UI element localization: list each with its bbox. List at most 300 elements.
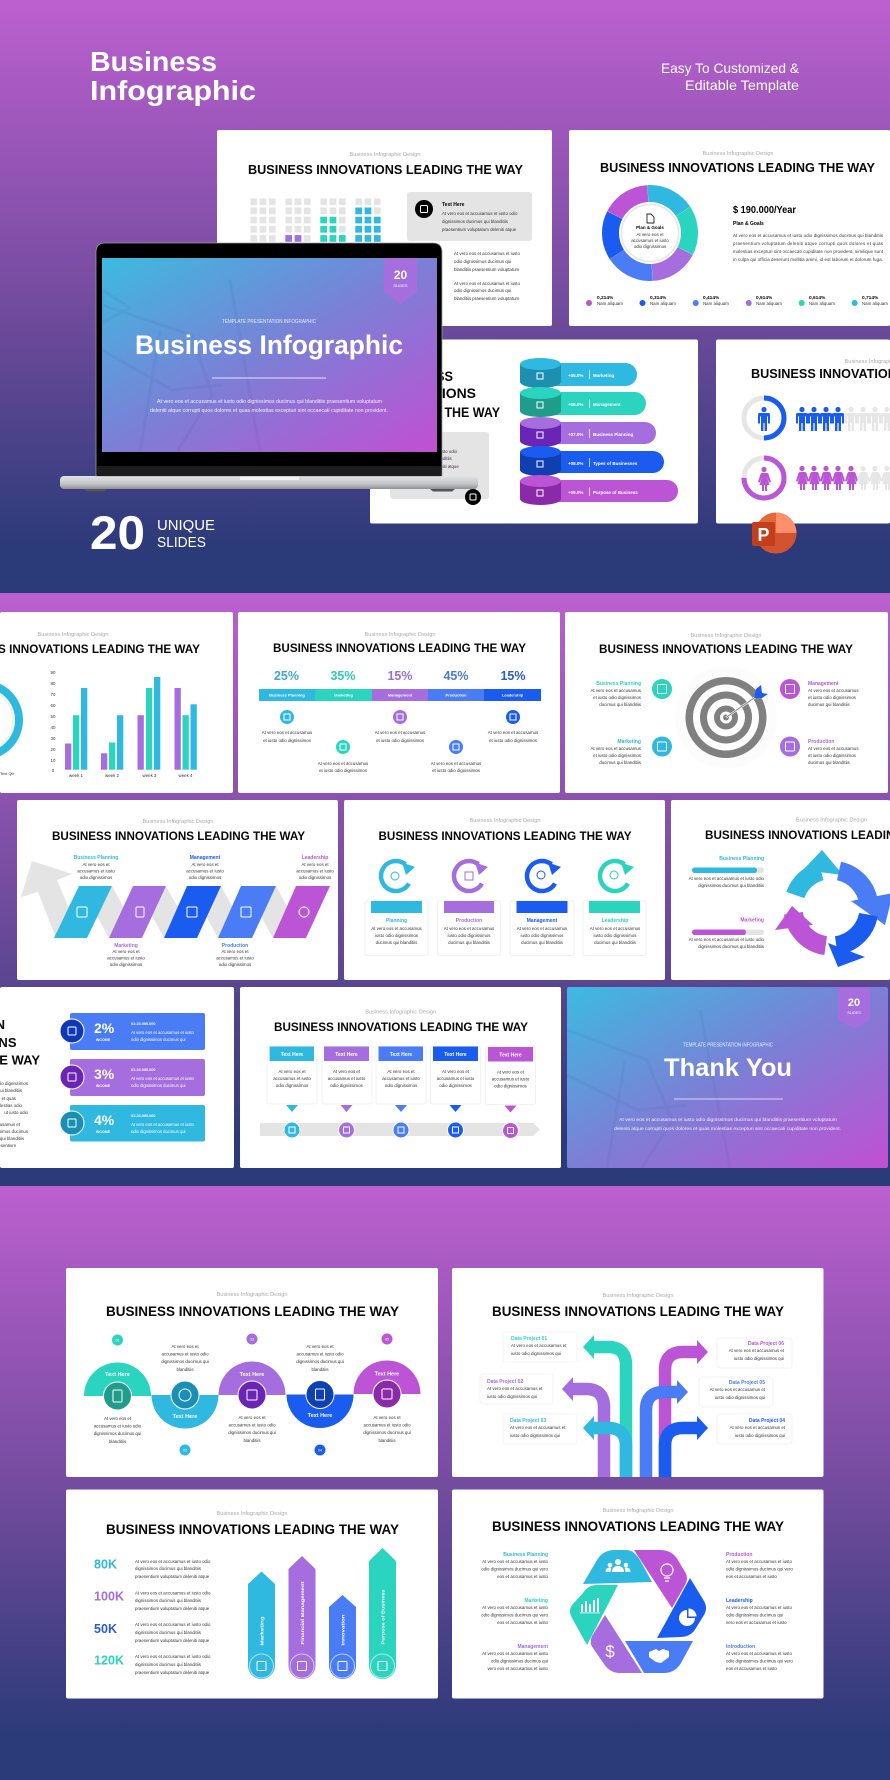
left captions: Business Planning [503,1552,548,1558]
lower captions: Production [222,943,248,949]
progress: marketing: dignissimos ducimus qui blanditiis [698,944,765,949]
step 1 [267,1046,317,1138]
legend: Nam aliquam [809,301,835,306]
heading: BUSINESS INNOVATIONS LEADING THE WAY [600,161,876,175]
right captions: et iusto odio dignissimos [808,753,857,758]
upper captions: odio dignissimos [80,875,113,880]
bar chart: week 3 [143,773,157,778]
wave segment 2: dignissimos ducimus qui [161,1359,209,1364]
percentages: 25% [274,669,299,683]
price text [733,205,884,262]
right captions: Introduction [726,1644,755,1650]
subtitle: Editable Template [685,77,799,93]
bar chart [51,670,197,778]
step 5 [486,1047,536,1138]
card: 2 percent: odio dignissimos ducimus qui [131,1037,186,1042]
metric: 120K: At vero eos et accusamus et iusto odio [135,1654,211,1659]
screen body text: At vero eos et accusamus et iusto odio dignissimos ducimus qui blanditiis praesentium voluptatum [157,399,382,405]
wave segment 5: accusamus et iusto odio [363,1422,411,1428]
card: data project 05: iusto odio dignissimos qui [715,1395,765,1400]
text block: ut iusto odio [4,1110,29,1115]
hexagon cycle [570,1550,706,1673]
icons [652,679,800,756]
step 3: At vero eos et [387,1069,415,1074]
card: data project 01 [503,1332,577,1362]
metric: 50K: praesentium voluptatum deleniti atque [135,1638,210,1643]
icon: pie [679,1608,696,1626]
arrow: innovation: Innovation [340,1614,346,1645]
step 1: At vero eos et [278,1069,306,1074]
left captions: eos et accusamus et iusto [497,1620,549,1625]
upper captions [74,855,334,880]
main title [90,46,256,106]
panel: branching arrows slide [452,1268,824,1477]
captions [262,730,539,773]
icon: people [606,1559,630,1572]
bar chart: 40 [51,725,56,730]
step 1: odio dignissimos [276,1083,309,1088]
card: management: ducimus qui blanditiis [521,940,564,945]
bar: management [520,387,646,417]
panel: percent bar slide: Business Infographic Design [365,632,435,638]
percentages [274,669,526,683]
callout box [390,432,489,505]
captions: et iusto odio dignissimos [432,768,481,773]
heading [381,369,500,420]
upper captions: accusamus et iusto [186,868,224,874]
partial donut [0,684,19,776]
people row: magenta [796,466,890,490]
panel: target slide [565,612,888,793]
heading: BUSINESS INNOVATIONS LEADING THE WAY [492,1304,784,1319]
left captions: odio dignissimos ducimus qui [491,1658,548,1664]
ring: magenta [744,458,784,498]
metric: 120K: dignissimos ducimus qui blanditiis [135,1662,202,1667]
card: 4 percent: At vero eos et accusamus et iusto [131,1122,195,1127]
text block [454,251,520,301]
price text: Plan & Goals [733,221,764,227]
screen body text: deleniti atque corrupti quos dolores et quas molestias excepturi sint occaecati cupiditate non provident. [150,408,388,414]
left captions: vero eos et accusamus et iusto [487,1666,549,1671]
left captions: ducimus qui blanditiis [599,702,642,707]
legend: 0,214% [597,295,614,301]
lower captions [107,943,254,967]
badge [384,258,417,304]
panel: target slide: Business Infographic Design [691,633,761,639]
captions: At vero eos et accusamus [488,730,539,735]
right captions: odio dignissimos ducimus qui vero [726,1566,793,1572]
card: data project 03 [503,1414,577,1444]
captions: et iusto odio dignissimos [319,768,368,773]
heading: BUSINESS INNOVATIONS LEADING THE WAY [492,1519,784,1534]
timeline band [260,1123,540,1136]
callout box: voluptatum deleniti atque [410,464,459,469]
legend: Nam aliquam [703,301,729,306]
wave segment 2: accusamus et iusto odio [161,1352,209,1356]
background section 1 [0,0,890,593]
card: data project 06 [717,1338,792,1368]
left captions: et iusto odio dignissimos [593,695,642,700]
wave segment 1: blanditiis [109,1439,127,1444]
legend: 0,714% [862,295,879,301]
segmented bar [259,689,541,701]
wave segment 4: Text Here [308,1413,332,1419]
card: production [438,856,500,956]
upper captions: At vero eos et [191,862,219,867]
card: 3 percent: INCOME [96,1084,111,1088]
bar: marketing [520,358,637,388]
wave segment 2: blanditiis [176,1367,194,1372]
zigzag arrow [21,861,330,938]
icon: bar chart [580,1598,600,1613]
text block: et quas [2,1096,17,1101]
right captions: At vero eos et accusamus et iusto [726,1559,792,1564]
slide count: SLIDES [157,534,206,551]
captions: et iusto odio dignissimos [376,738,425,743]
bar chart: 90 [51,670,56,675]
card: data project 05: Data Project 05 [729,1380,765,1386]
target icon [675,666,777,768]
heading: LEADING THE WAY [385,405,500,420]
right captions: vero eos et accusamus et iusto [726,1620,787,1625]
price text: At vero eos et accusamus et iusto odio dignissimos ducimus qui blanditiis [733,233,884,238]
heading: BUSINESS INNOVATIONS LEADING THE WAY [248,163,524,177]
panel: bar chart slide: Business Infographic Design [38,632,108,638]
lower captions: accusamus et iusto [107,956,145,960]
metric: 50K: dignissimos ducimus qui blanditiis [135,1630,202,1635]
card: planning: ducimus qui blanditiis [376,940,418,945]
bar chart: 80 [51,681,56,686]
left captions: Marketing [617,739,641,745]
text block: odio dignissimos ducimus qui [454,259,511,264]
legend: Nam aliquam [862,301,888,306]
percentages: 45% [443,669,469,683]
arrow: financial management [288,1556,316,1679]
arrow: purpose of business: Purpose of Business [380,1589,386,1645]
metric: 120K: 120K [94,1652,125,1668]
panel: waffle chart slide: Business Infographic Design [350,152,420,158]
wave segment 3: dignissimos ducimus qui [228,1430,276,1435]
legend: Nam aliquam [756,301,782,306]
bar chart: 70 [51,692,56,697]
bar chart: week 1 [69,773,84,778]
right captions: At vero eos et accusamus [808,746,859,751]
badge: SLIDES [847,1011,861,1015]
card: data project 02 [480,1374,553,1404]
step 4: odio dignissimos [439,1083,473,1088]
subtitle [661,60,800,93]
captions: At vero eos et accusamus [262,730,313,735]
card: production: iusto odio dignissimos [448,933,491,938]
progress: business planning: dignissimos ducimus qui blanditiis [698,883,765,888]
right captions: At vero eos et accusamus [808,688,859,693]
wave segment 5 [354,1334,420,1443]
card: data project 05: At vero eos et accusamus et [710,1387,766,1392]
laptop screen: TEMPLATE PRESENTATION INFOGRAPHIC [222,319,316,325]
bar: management: +06.0% [568,402,583,407]
badge: SLIDES [393,283,408,288]
heading: BUSINESS INNOVATIONS LEADING THE WAY [378,829,632,843]
icons [280,710,520,754]
wave segment 4: accusamus et iusto odio [296,1352,344,1356]
left captions: ducimus qui blanditiis [599,760,642,765]
text block: odio dignissimos ducimus qui [454,288,511,293]
badge [838,987,870,1029]
donut centre: Plan & Goals [636,225,664,230]
text block [0,1081,29,1148]
icon: bulb [661,1564,673,1581]
arrow: innovation [329,1595,356,1679]
step 1: Text Here [281,1052,303,1058]
captions: et iusto odio dignissimos [489,738,538,743]
bar: marketing: +05.0% [568,373,583,378]
card: data project 04: iusto odio dignissimos qui [735,1433,785,1438]
left captions [590,681,642,765]
arrow: purpose of business [369,1548,396,1679]
card: management: Management [527,918,558,924]
upper captions: Business Planning [74,855,118,861]
card: 3 percent: At vero eos et accusamus et iusto [131,1076,195,1081]
card: 4 percent: 01:23.000.000 [131,1114,156,1118]
card: 3 percent: odio dignissimos ducimus qui [131,1083,186,1088]
callout box [407,192,532,241]
bar chart: 20 [51,747,56,752]
metric: 120K [94,1652,211,1675]
subtitle: Easy To Customized & [661,60,800,76]
wave segment 5: dignissimos ducimus qui [363,1430,411,1435]
legend: 0,614% [809,295,826,301]
legend: Nam aliquam [650,301,676,306]
icon: powerpoint: P [757,525,770,545]
wave segment 4: dignissimos ducimus qui [296,1359,344,1364]
panel: hexagon cycle slide: Business Infographic Design [603,1508,673,1514]
card: management: At vero eos et accusamus [517,926,568,931]
step 1: accusamus et iusto [273,1076,311,1081]
text block: At vero eos et accusamus et iusto [454,251,520,256]
card: data project 04 [717,1414,792,1444]
card: planning [365,856,428,956]
right captions: Production [808,739,834,745]
waffle grid [250,198,381,253]
lower captions: At vero eos et [221,949,249,954]
left captions: At vero eos et accusamus et iusto [482,1559,549,1564]
metric: 80K [94,1556,211,1579]
card: leadership: iusto odio dignissimos [594,933,637,938]
thank you title: Thank You [664,1054,792,1082]
panel: income cards slide [0,987,234,1168]
panel: donut slide: Business Infographic Design [703,151,773,157]
left captions: et iusto odio dignissimos [593,753,642,758]
card: leadership: ducimus qui blanditiis [594,940,637,945]
card: data project 01: iusto odio dignissimos qui [511,1351,561,1356]
step 2: accusamus et iusto [328,1076,366,1081]
bar chart: 0 [52,768,55,773]
text block: blanditiis praesentium voluptatum [454,267,520,272]
legend: 0,414% [703,295,720,301]
panel: thank you slide [567,987,888,1168]
metric: 50K: At vero eos et accusamus et iusto odio [135,1622,211,1627]
card: 2 percent: INCOME [96,1038,111,1042]
card: data project 02: Data Project 02 [487,1379,523,1385]
metric: 100K: At vero eos et accusamus et iusto odio [135,1590,211,1596]
panel: rising arrows slide: Business Infographic Design [217,1511,287,1517]
donut centre: At vero eos et [636,232,664,237]
arrow: marketing [248,1572,275,1679]
heading: BUSINESS INNOVATIONS LEADING THE WAY [52,829,305,843]
panel: percent bar slide [238,612,560,793]
bar: purpose of business: Purpose of Business [593,490,638,495]
card: data project 06: At vero eos et accusamus et [729,1348,785,1353]
upper captions: At vero eos et [301,862,329,867]
step 3: Text Here [390,1052,412,1058]
step 5: At vero eos et [497,1070,525,1074]
bar chart: 30 [51,736,56,741]
heading: BUSINESS INNOVATIONS LEADING THE WAY [106,1304,399,1319]
wave segment 4 [286,1344,354,1456]
panel: zigzag arrow slide: Business Infographic Design [143,819,213,825]
wave segment 5: 05 [385,1338,389,1342]
right captions: Production [726,1552,752,1558]
icon: handshake [649,1649,669,1663]
bar: business planning [520,417,656,447]
card: 3 percent: 3% [94,1066,115,1082]
wave segment 5: blanditiis [378,1438,396,1443]
bar chart: 50 [51,714,56,719]
heading: INNOVATIONS [381,386,476,401]
card: data project 06: iusto odio dignissimos qui [734,1356,784,1361]
panel: hexagon cycle slide [452,1490,824,1698]
card: production: At vero eos et accusamus [444,926,495,931]
metric: 100K: dignissimos ducimus qui blanditiis [135,1598,202,1603]
wave segment 3: Text Here [240,1372,264,1378]
wave segment 1: dignissimos ducimus qui [94,1431,141,1436]
panel: cycle cards slide: Business Infographic Design [470,818,540,824]
text block: qui blanditiis [0,1136,25,1141]
panel: wave slide: Business Infographic Design [217,1292,287,1298]
bar: management: Management [593,402,621,407]
left captions: Management [517,1644,548,1650]
card: 2 percent [60,1013,205,1050]
right captions: eos et accusamus et iusto [726,1574,777,1579]
laptop [60,243,478,492]
step 5: accusamus et iusto [492,1076,530,1082]
metric: 120K: praesentium voluptatum deleniti atque [135,1670,210,1675]
step 5: Text Here [499,1052,522,1058]
step 3 [376,1046,426,1138]
callout box: accusamus et iusto odio [410,449,458,454]
body text: deleniti atque corrupti quos dolores et quas molestias excepturi sint occaecati cupiditate non provident. [614,1126,841,1132]
bar: business planning: +07.0% [568,432,583,437]
card: data project 02: iusto odio dignissimos qui [487,1394,537,1399]
card: data project 04: Data Project 04 [749,1418,785,1424]
panel: people chart slide [716,340,890,524]
step 2: At vero eos et [333,1069,361,1074]
panel: cycle cards slide [344,800,665,980]
upper captions: odio dignissimos [189,875,222,880]
background section 3 [0,1186,890,1780]
lower captions: odio dignissimos [110,962,143,967]
card: 2 percent: 01:23.000.000 [131,1022,156,1026]
card: data project 03: At vero eos et accusamus et [510,1425,566,1430]
progress: business planning: At vero eos et accusamus et iusto odio [689,876,765,881]
panel: circular arrows slide [671,800,890,980]
text block: At vero eos et accusamus et iusto [454,281,520,286]
callout box: Text Here [442,202,465,208]
panel: cylinder bars slide [370,340,698,524]
step 2 [322,1046,372,1138]
segmented bar: Business Planning [269,692,305,698]
step 2: Text Here [335,1052,358,1058]
callout box: ducimus qui blanditiis [410,456,453,461]
text block: blanditiis praesentium voluptatum [454,296,520,301]
lower captions: odio dignissimos [219,962,252,967]
right captions: At vero eos et accusamus et iusto [726,1605,792,1610]
body text [614,1117,841,1132]
legend: 0,314% [650,295,667,301]
wave segment 4: 04 [318,1448,322,1452]
right captions: ducimus qui blanditiis [808,760,851,765]
badge: 20 [848,997,860,1009]
step 4: accusamus et iusto [437,1076,475,1081]
card: management [510,856,574,956]
metric: 80K: 80K [94,1556,118,1572]
bar: types of businesses: +08.0% [568,461,583,466]
panel: thank you slide: TEMPLATE PRESENTATION INFOGRAPHIC [683,1042,773,1048]
right captions: Management [808,681,839,687]
card: planning: At vero eos et accusamus [371,926,423,931]
wave segment 3 [218,1334,286,1443]
wave segment 4: At vero eos et [306,1344,334,1349]
right captions [808,681,859,765]
upper captions: Management [190,855,221,861]
bar: purpose of business [520,475,678,505]
metric: 100K [94,1588,211,1611]
bar: business planning: Business Planning [593,432,634,437]
price text: molestias excepturi sint occaecati cupiditate non provident, similique sunt [733,249,884,254]
donut centre: accusamus et iusto [631,238,669,243]
upper captions: Leadership [302,855,328,861]
main title: Infographic [90,75,256,106]
progress: business planning: Business Planning [719,856,764,862]
wave segment 1: 01 [115,1338,120,1342]
wave segment 4: blanditiis [311,1367,329,1372]
wave segment 1: accusamus et iusto odio [94,1424,142,1428]
metric: 50K: 50K [94,1621,118,1636]
card: leadership: At vero eos et accusamus [590,926,641,931]
screen body text [150,399,388,414]
upper captions: At vero eos et [82,862,110,867]
panel: bar chart slide [0,612,233,793]
panel: wave slide [66,1268,438,1477]
bar chart: 10 [51,758,56,763]
heading: BUSINESS INNOVATIONS LEADING THE WAY [273,641,526,655]
upper captions: accusamus et iusto [77,868,115,874]
callout box: At vero eos et accusamus et iusto odio [442,211,518,216]
right captions: odio dignissimos ducimus qui vero [726,1658,793,1664]
lower captions: accusamus et iusto [216,956,254,960]
card: 3 percent: 01:23.000.000 [131,1068,156,1072]
card: planning: iusto odio dignissimos [375,933,419,938]
percentages: 35% [330,669,356,683]
step 3: accusamus et iusto [382,1076,420,1081]
metric: 100K: praesentium voluptatum deleniti atque [135,1606,210,1611]
background section 2 [0,593,890,1186]
wave segment 3: accusamus et iusto odio [228,1422,276,1428]
panel: branching arrows slide: Business Infographic Design [603,1293,673,1299]
panel: donut slide [569,130,890,326]
left captions: Business Planning [596,681,641,687]
heading: BUSINESS [388,369,453,384]
